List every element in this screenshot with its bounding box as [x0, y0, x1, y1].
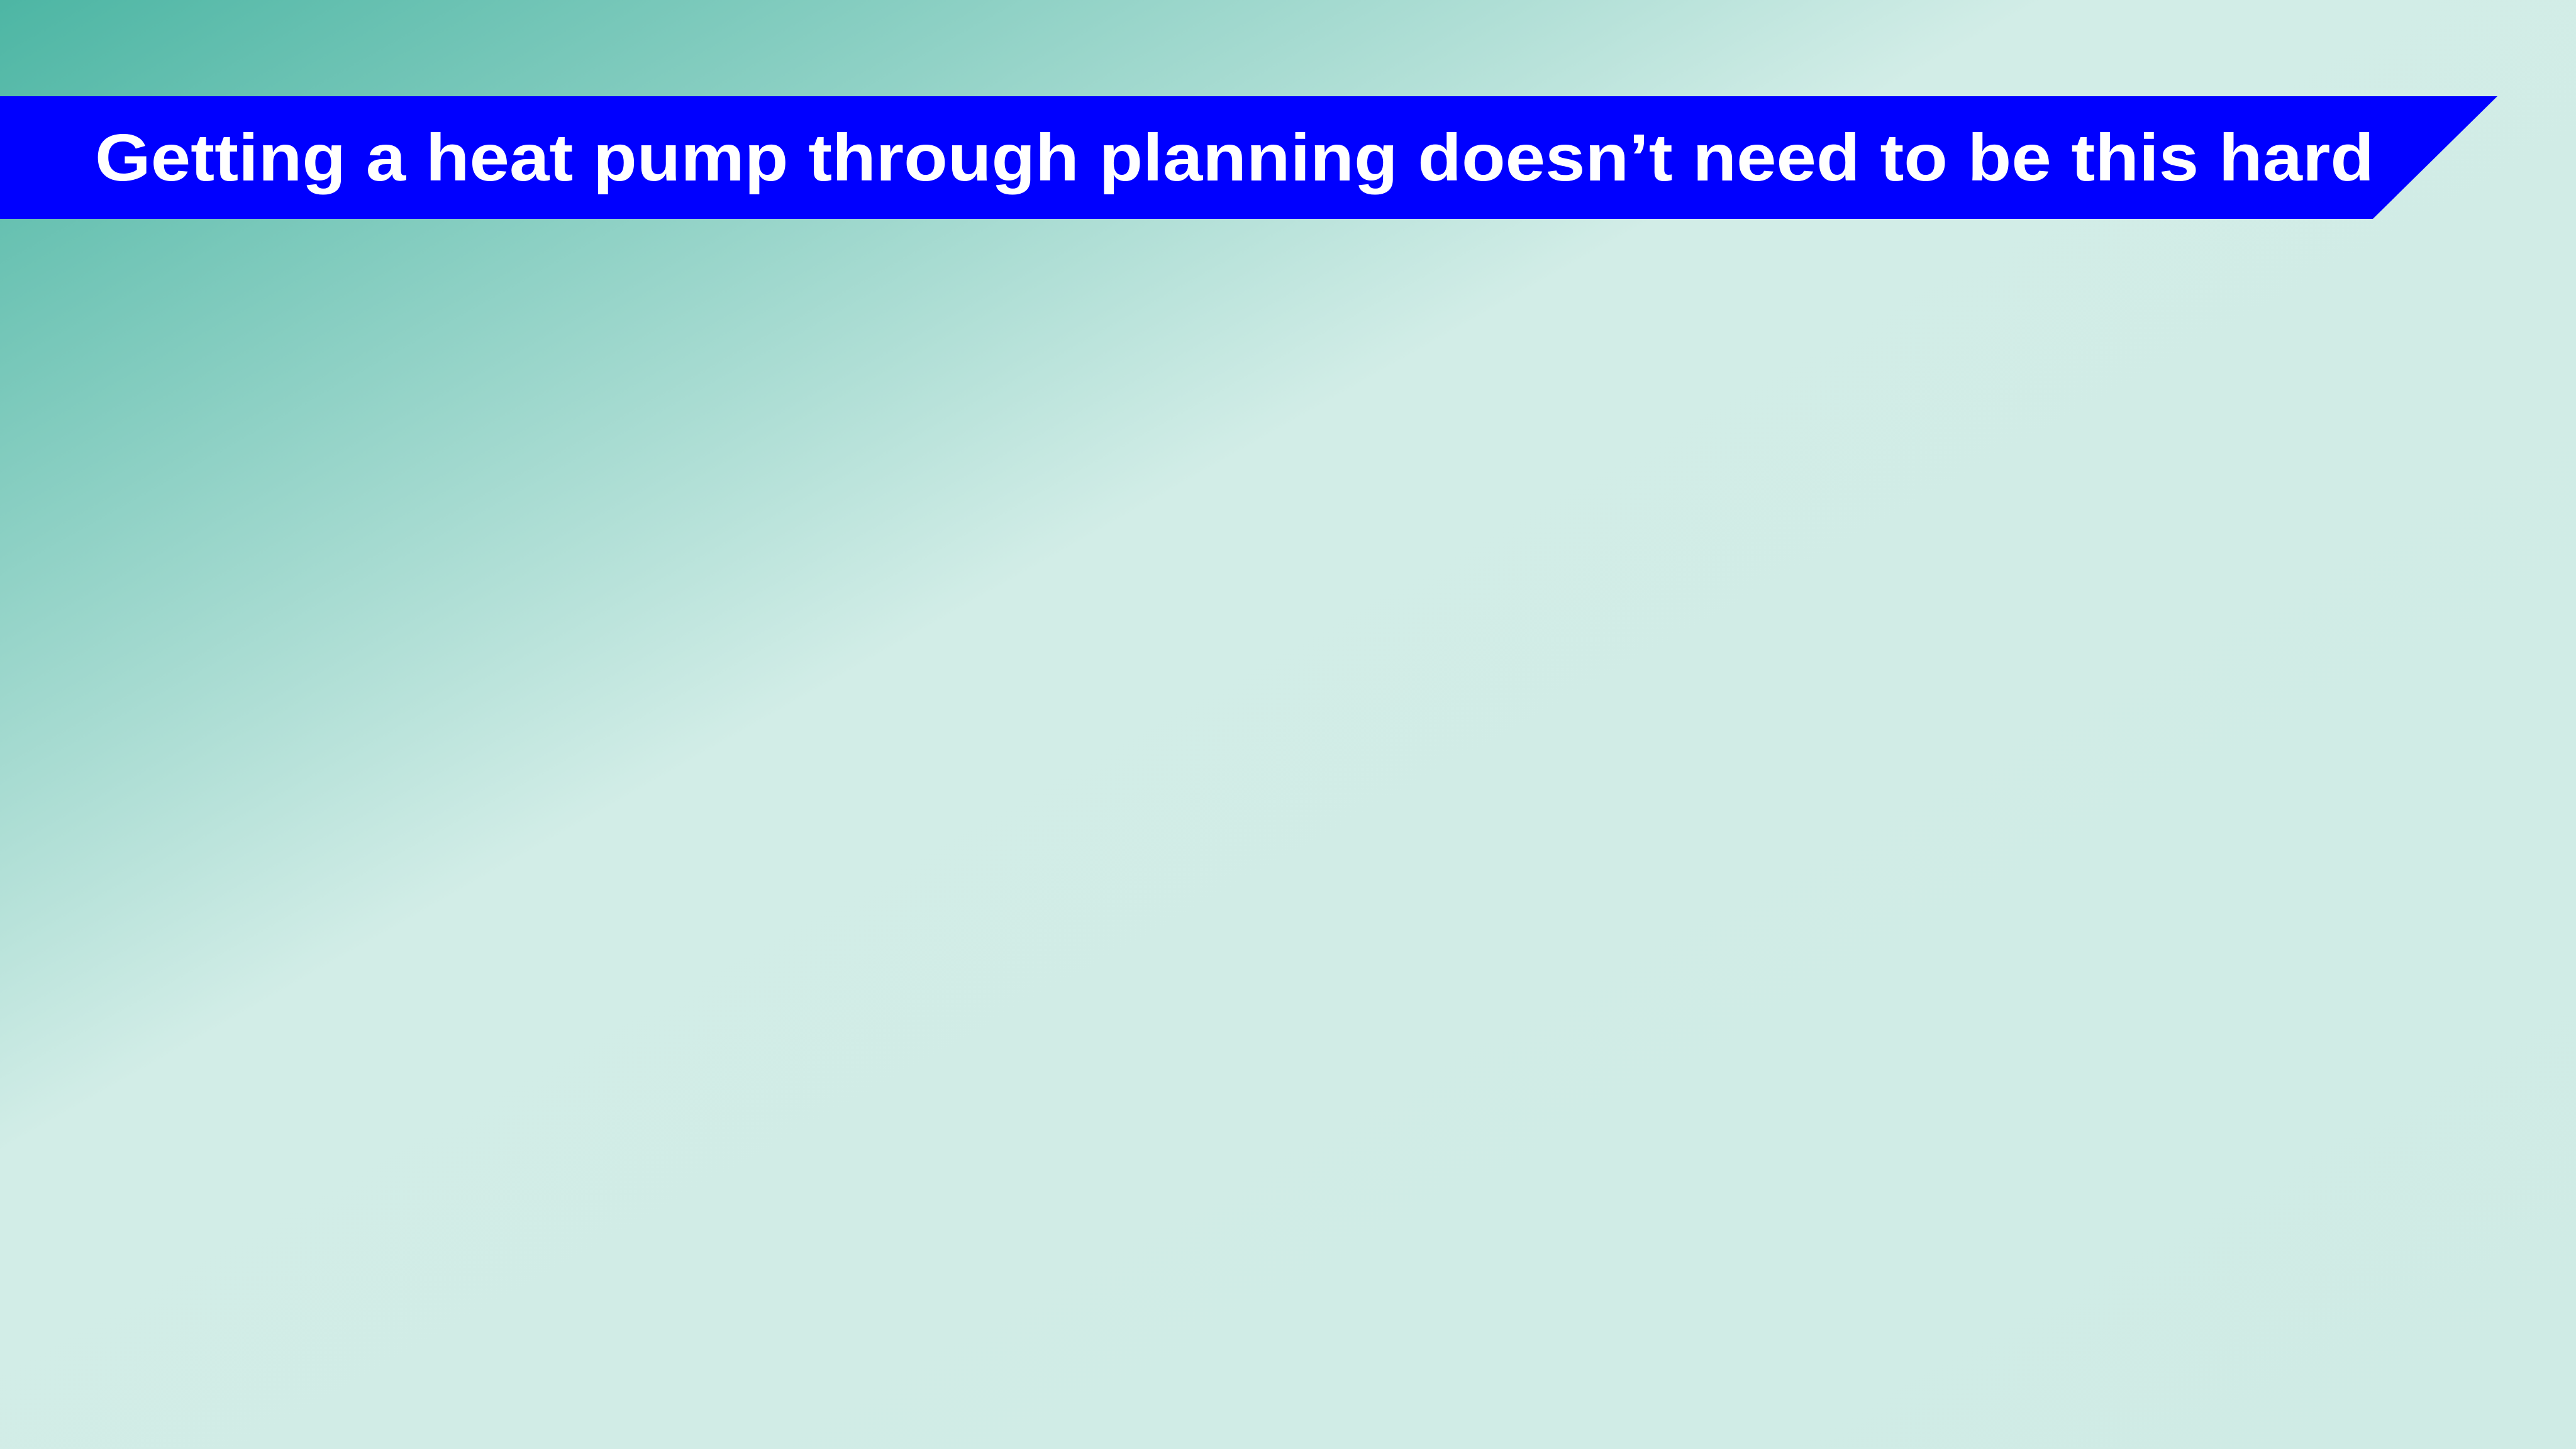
banner shape	[0, 96, 2497, 219]
title: Getting a heat pump through planning doesn’t need to be this hard	[95, 121, 2374, 195]
title banner	[0, 96, 2497, 219]
